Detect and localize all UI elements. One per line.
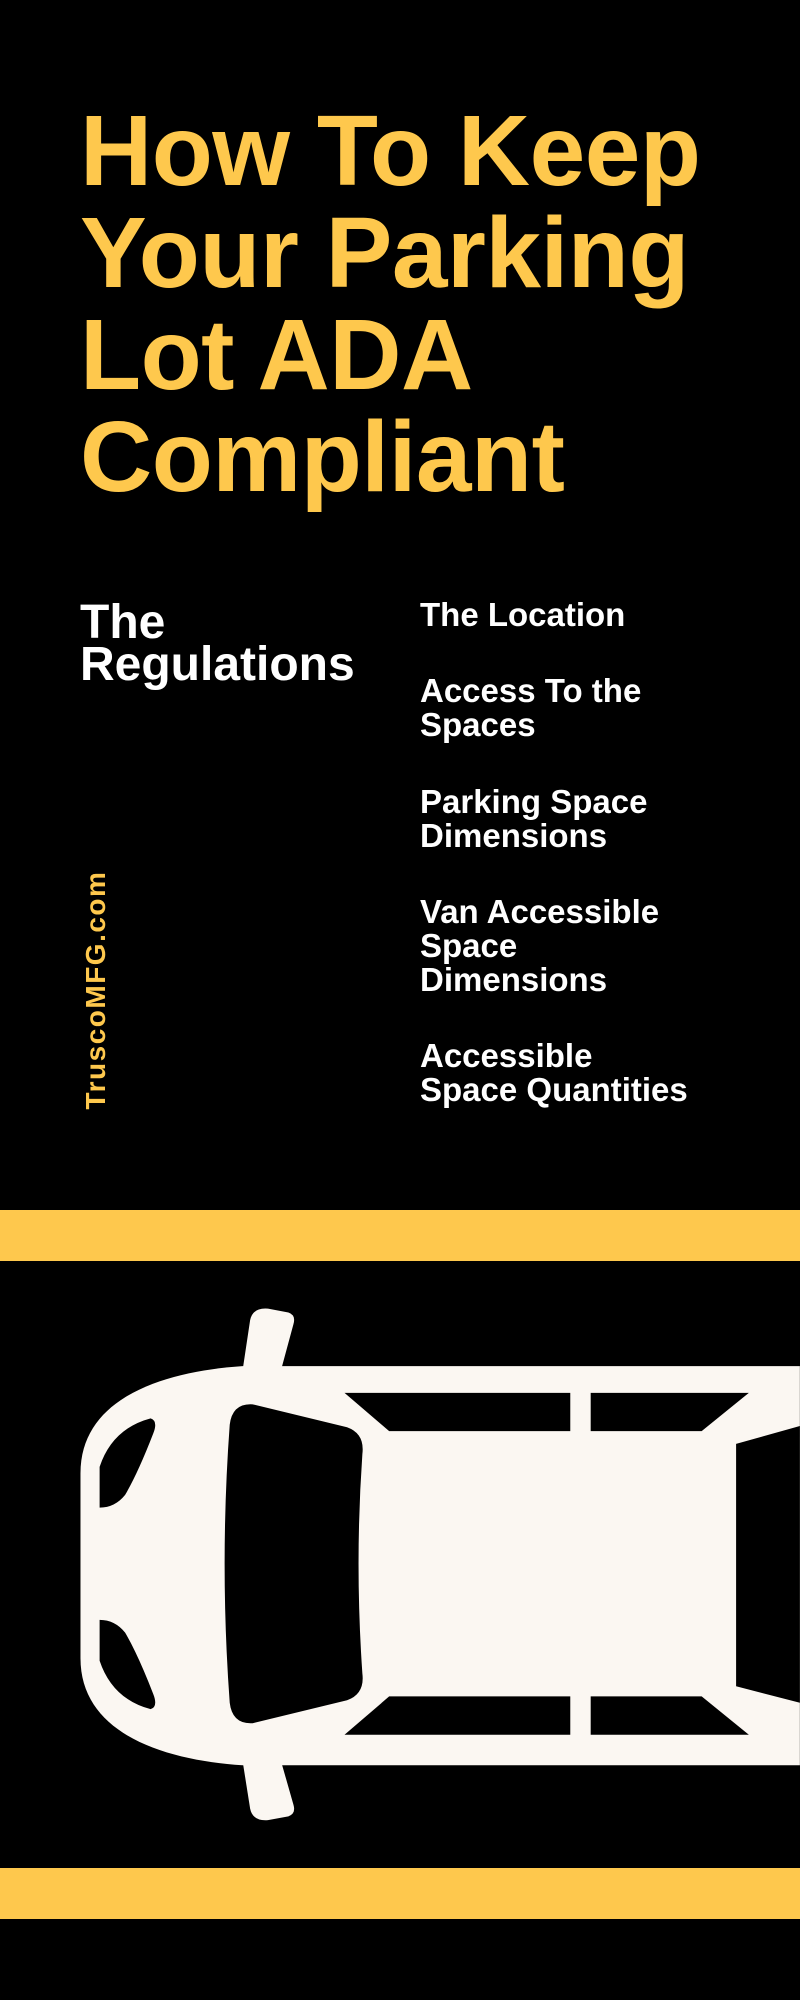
subheading: the regulations: Regulations xyxy=(80,638,355,691)
item: quantities xyxy=(420,1037,688,1108)
item: dimensions xyxy=(420,783,647,854)
item: quantities: Accessible xyxy=(420,1037,592,1074)
body xyxy=(80,1366,800,1765)
brand url vertical: TruscoMFG.com xyxy=(80,871,111,1109)
item: access: Spaces xyxy=(420,706,536,743)
list of regulations xyxy=(420,596,688,1108)
item: access: Access To the xyxy=(420,672,641,709)
windshield xyxy=(225,1404,363,1723)
item: van dimensions: Space xyxy=(420,927,517,964)
headlights xyxy=(100,1418,155,1508)
subheading: the regulations xyxy=(80,596,355,691)
title xyxy=(80,95,700,513)
top yellow stripe xyxy=(0,1210,800,1261)
item: access xyxy=(420,672,641,743)
subheading: the regulations: The xyxy=(80,596,165,649)
item: van dimensions: Van Accessible xyxy=(420,893,659,930)
item: van dimensions: Dimensions xyxy=(420,961,607,998)
item: location: The Location xyxy=(420,596,625,633)
title: Lot ADA xyxy=(80,299,473,411)
item: dimensions: Dimensions xyxy=(420,817,607,854)
title: Compliant xyxy=(80,401,564,513)
side windows xyxy=(345,1393,570,1431)
bottom yellow stripe xyxy=(0,1868,800,1919)
item: dimensions: Parking Space xyxy=(420,783,647,820)
item: van dimensions xyxy=(420,893,659,998)
mirrors xyxy=(242,1309,294,1371)
title: How To Keep xyxy=(80,95,700,207)
title: Your Parking xyxy=(80,197,689,309)
rear window xyxy=(736,1426,800,1703)
item: quantities: Space Quantities xyxy=(420,1071,688,1108)
